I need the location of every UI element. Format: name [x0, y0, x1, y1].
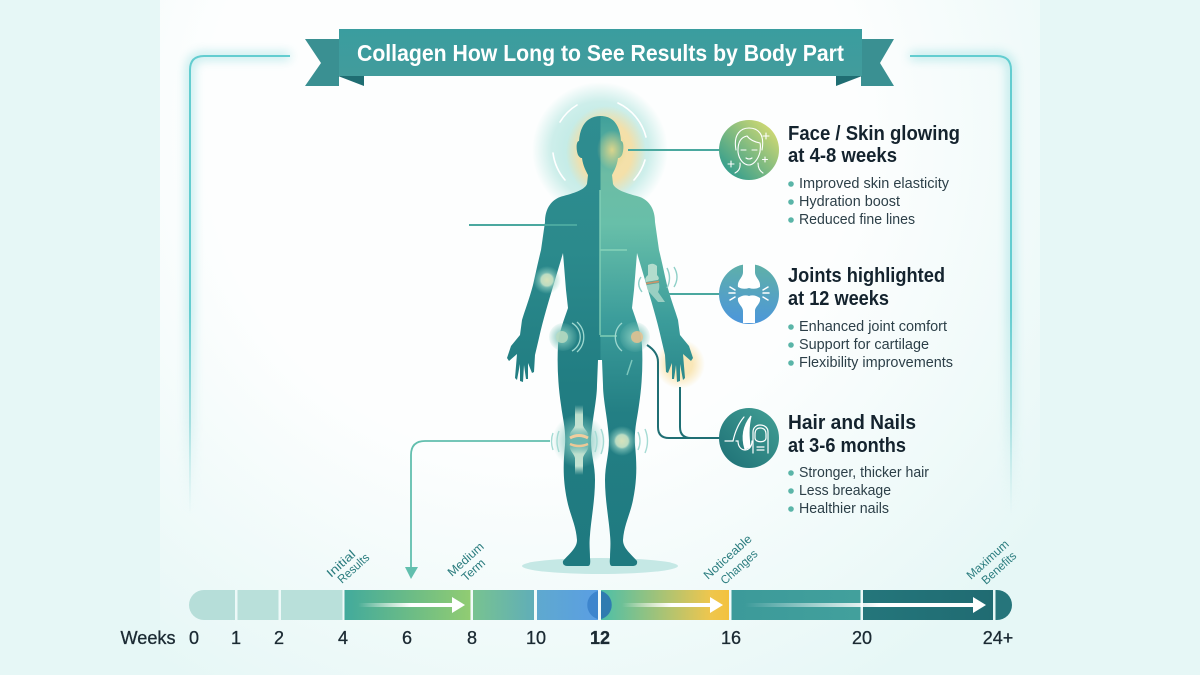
- week axis labels: 2: [274, 628, 284, 648]
- icon: hair and nail: [719, 408, 779, 468]
- week axis labels: 10: [526, 628, 546, 648]
- progress arrow: 4 to 8: [358, 597, 465, 613]
- bullet list: Healthier nails: [799, 500, 889, 517]
- floor shadow: [522, 558, 678, 574]
- bullet list: Stronger, thicker hair: [799, 464, 929, 481]
- title: Collagen How Long to See Results by Body Part: [357, 40, 844, 66]
- heading: at 4-8 weeks: [788, 144, 897, 167]
- bullet list: Flexibility improvements: [799, 354, 953, 371]
- hand glow: [655, 339, 705, 389]
- centre line and organ lines: [600, 190, 627, 336]
- hip spot: left: [549, 322, 584, 352]
- week axis labels: 16: [721, 628, 741, 648]
- week axis labels: 8: [467, 628, 477, 648]
- ribbon body: [339, 29, 862, 76]
- body right half: [600, 116, 693, 566]
- icon: face: [719, 120, 779, 180]
- milestone labels: [324, 531, 1019, 587]
- connector: face: [628, 149, 722, 151]
- title banner: [305, 29, 894, 86]
- frame line: left: [190, 56, 290, 515]
- heading: [788, 122, 960, 167]
- frame line: right: [910, 56, 1011, 515]
- milestone labels: Term: [459, 556, 488, 584]
- head halo: [532, 82, 668, 218]
- milestone labels: Results: [335, 550, 372, 586]
- week axis labels: 1: [231, 628, 241, 648]
- bullet list: [788, 318, 953, 371]
- heading: at 3-6 months: [788, 434, 906, 457]
- section: joints: [719, 264, 953, 371]
- knee joint: left: [552, 405, 606, 475]
- bullet list: Reduced fine lines: [799, 211, 915, 228]
- arrow: knee to timeline: [405, 441, 550, 579]
- face glow: [597, 130, 627, 170]
- heading: at 12 weeks: [788, 287, 889, 310]
- milestone labels: Initial: [324, 547, 358, 580]
- milestone labels: Changes: [718, 547, 760, 587]
- week axis labels: [120, 628, 1013, 648]
- bullet list: [788, 175, 949, 228]
- week axis labels: 6: [402, 628, 412, 648]
- bullet list: [788, 464, 929, 517]
- human body figure: [507, 116, 693, 566]
- week axis labels: 12: [590, 628, 610, 648]
- connector: joints: [668, 293, 722, 295]
- section: face and skin: [719, 120, 960, 228]
- milestone labels: Noticeable: [701, 531, 755, 582]
- week axis labels: 0: [189, 628, 199, 648]
- progress arrow: 12 to 16: [622, 597, 723, 613]
- icon: knee joint: [719, 264, 779, 324]
- elbow spot: left: [533, 266, 561, 294]
- ribbon tails: [305, 39, 894, 86]
- progress arrow: 16 to 24: [745, 597, 986, 613]
- week axis labels: Weeks: [120, 628, 176, 648]
- heading: [788, 411, 916, 457]
- bullet list: Improved skin elasticity: [799, 175, 949, 192]
- milestone labels: Benefits: [979, 549, 1019, 587]
- bullet list: Less breakage: [799, 482, 891, 499]
- bullet list: Enhanced joint comfort: [799, 318, 948, 335]
- connector: chest: [469, 224, 577, 226]
- heading: Face / Skin glowing: [788, 122, 960, 145]
- heading: Hair and Nails: [788, 411, 916, 434]
- milestone labels: Maximum: [964, 537, 1012, 582]
- week 12 marker: [587, 591, 612, 619]
- knee spot: right: [607, 426, 648, 456]
- body left half: [507, 116, 600, 566]
- milestone labels: Medium: [445, 539, 487, 579]
- bullet list: Support for cartilage: [799, 336, 929, 353]
- bullet list: Hydration boost: [799, 193, 901, 210]
- week axis labels: 20: [852, 628, 872, 648]
- section: hair and nails: [719, 408, 929, 517]
- elbow joint: right: [639, 264, 677, 302]
- week axis labels: 24+: [983, 628, 1013, 648]
- heading: [788, 264, 945, 310]
- week axis labels: 4: [338, 628, 348, 648]
- timeline bar: [189, 590, 1012, 620]
- heading: Joints highlighted: [788, 264, 945, 287]
- connector: hair and nails: [647, 345, 722, 438]
- hip spot: right: [615, 322, 650, 375]
